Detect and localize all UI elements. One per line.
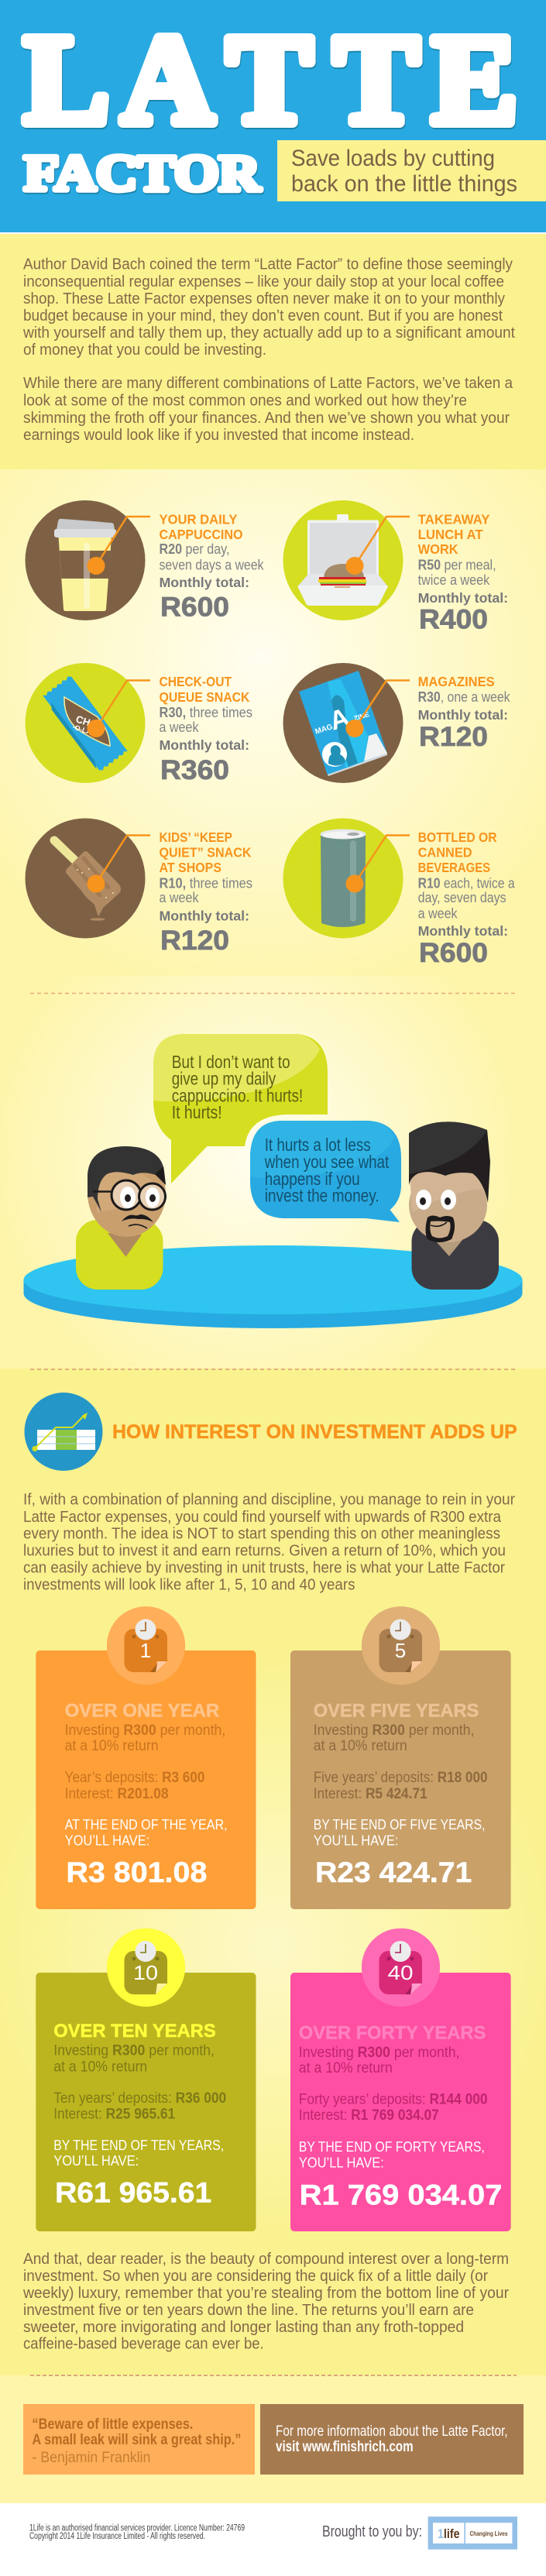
item text: QUEUE SNACK	[160, 689, 250, 705]
speech bubble: right: It hurts a lot less	[265, 1135, 371, 1155]
icon: ice lolly	[25, 818, 146, 939]
item text: BEVERAGES	[418, 860, 490, 875]
card: over forty years	[290, 1929, 511, 2231]
intro text block: Author David Bach coined the term “Latte Factor” to define those seemingly	[23, 256, 513, 273]
icon: lunch box	[283, 500, 403, 620]
footer legal text	[29, 2524, 245, 2541]
speech bubble: left: give up my daily	[172, 1069, 276, 1089]
card: over one year	[36, 1606, 256, 1909]
card text: at a 10% return	[65, 1737, 159, 1754]
item: canned beverages	[283, 818, 515, 968]
card: over five years	[290, 1606, 511, 1909]
investment text block: If, with a combination of planning and discipline, you manage to rein in your	[23, 1491, 515, 1509]
card text: Investing R300 per month,	[53, 2042, 215, 2059]
conversation scene	[23, 1034, 522, 1328]
item text: day, seven days	[418, 890, 507, 905]
item text: CHECK-OUT	[160, 674, 232, 689]
item text: Monthly total:	[160, 575, 249, 590]
item text: Monthly total:	[160, 737, 249, 753]
item: check-out snack	[25, 663, 252, 785]
quote box: “Beware of little expenses.	[32, 2416, 193, 2433]
closing text block: weekly) luxury, remember that you’re stealing from the bottom line of your	[22, 2284, 509, 2302]
investment text block: luxuries but to invest it and earn returns. Given a return of 10%, which you	[23, 1542, 506, 1560]
intro text block: skimming the froth off your finances. And then we’ve shown you what your	[23, 410, 510, 427]
card text: OVER TEN YEARS	[53, 2021, 216, 2042]
card text	[53, 2021, 226, 2208]
item text: R400	[419, 605, 488, 635]
icon: chocolate bar: -O-LA	[71, 723, 93, 737]
item: magazines	[283, 663, 510, 783]
card text	[299, 2022, 502, 2211]
card text: at a 10% return	[314, 1737, 407, 1754]
badge: 10: 10	[133, 1961, 158, 1984]
speech bubble: left: cappuccino. It hurts!	[172, 1086, 303, 1106]
header banner	[0, 0, 546, 232]
investment text block: investments will look like after 1, 5, 10 and 40 years	[23, 1576, 355, 1594]
card text: AT THE END OF THE YEAR,	[65, 1816, 228, 1832]
card text: Investing R300 per month,	[299, 2044, 460, 2061]
card text: Interest: R1 769 034.07	[299, 2107, 439, 2124]
badge: 5	[362, 1606, 440, 1685]
item: daily cappuccino	[25, 500, 264, 623]
logo: 1Life	[428, 2516, 517, 2550]
card text: OVER ONE YEAR	[65, 1701, 219, 1722]
footer legal text: 1Life is an authorised financial services provider. Licence Number: 24769	[29, 2524, 245, 2533]
investment text block: can easily achieve by investing in unit trusts, here is what your Latte Factor	[23, 1559, 505, 1577]
item text: Monthly total:	[418, 923, 508, 939]
item text: AT SHOPS	[160, 860, 221, 875]
card text: YOU’LL HAVE:	[314, 1832, 398, 1849]
quote box: A small leak will sink a great ship.”	[32, 2431, 241, 2448]
title: Latte: LATTE	[24, 9, 517, 150]
footer legal text: Copyright 2014 1Life Insurance Limited - All rights reserved.	[29, 2532, 205, 2541]
character: man with glasses	[76, 1146, 166, 1290]
closing text block	[22, 2250, 509, 2353]
closing text block: investment five or ten years down the line. The returns you’ll earn are	[23, 2301, 474, 2319]
item text: a week	[160, 720, 199, 735]
item: takeaway lunch	[283, 500, 508, 635]
item text: a week	[160, 890, 199, 905]
item text: Monthly total:	[418, 707, 508, 723]
icon: chocolate bar: CHO	[74, 713, 99, 731]
intro text block: with yourself and tally them up, they actually add up to a significant amount	[22, 325, 515, 342]
speech bubble: right: happens if you	[265, 1169, 360, 1189]
item text: R600	[419, 938, 488, 968]
icon: drink can	[283, 818, 403, 939]
item text: R30, one a week	[418, 689, 510, 705]
icon: magazine: A	[326, 702, 353, 737]
badge: 1: 1	[140, 1639, 151, 1662]
footer sponsor: Brought to you by:	[322, 2523, 422, 2540]
investment text block: Latte Factor expenses, you could find yourself with upwards of R300 extra	[23, 1508, 502, 1526]
item text	[160, 829, 252, 956]
intro text block: budget because in your mind, they don’t even count. But if you are honest	[23, 307, 503, 325]
intro text block: of money that you could be investing.	[23, 342, 266, 359]
callout line	[345, 680, 410, 737]
closing text block: caffeine-based beverage can ever be.	[23, 2335, 264, 2353]
item text: R10, three times	[160, 875, 252, 891]
card text: Interest: R25 965.61	[53, 2105, 175, 2122]
card text	[65, 1701, 228, 1888]
intro text block: While there are many different combinations of Latte Factors, we’ve taken a	[23, 375, 513, 392]
speech bubble: right	[250, 1121, 401, 1222]
card: over ten years	[36, 1929, 256, 2231]
intro text block: earnings would look like if you invested that income instead.	[23, 427, 414, 444]
section heading: interest: HOW INTEREST ON INVESTMENT ADDS UP	[112, 1421, 517, 1443]
icon: magazine	[283, 663, 403, 783]
callout line	[87, 835, 150, 892]
item text: R50 per meal,	[418, 558, 496, 573]
icon: growth chart	[25, 1393, 102, 1471]
item: kids snack	[25, 818, 252, 956]
item text	[418, 829, 515, 968]
investment text block: every month. The idea is NOT to start spending this on other meaningless	[23, 1525, 500, 1543]
item text: CAPPUCCINO	[160, 527, 243, 542]
card text	[314, 1701, 488, 1888]
card text: Investing R300 per month,	[314, 1722, 474, 1739]
card text: at a 10% return	[53, 2058, 147, 2075]
closing text block: And that, dear reader, is the beauty of compound interest over a long-term	[23, 2250, 509, 2268]
card text: Interest: R5 424.71	[314, 1785, 428, 1802]
card text: YOU’LL HAVE:	[53, 2152, 139, 2169]
item text: a week	[418, 905, 458, 921]
item text	[418, 512, 508, 635]
item text: twice a week	[418, 572, 490, 588]
item text: R20 per day,	[160, 541, 229, 557]
item text	[418, 674, 510, 752]
badge: 10	[107, 1929, 185, 2007]
badge: 40: 40	[387, 1961, 414, 1984]
item text: YOUR DAILY	[160, 512, 238, 527]
item text: MAGAZINES	[418, 674, 495, 689]
subtitle tag	[277, 140, 546, 201]
item text	[160, 674, 252, 785]
badge: 5: 5	[395, 1639, 406, 1662]
item text: seven days a week	[160, 558, 264, 573]
badge: 40	[362, 1929, 440, 2007]
item text: WORK	[418, 541, 458, 557]
section heading: interest	[25, 1393, 517, 1471]
card text: BY THE END OF FORTY YEARS,	[299, 2138, 485, 2155]
item text: R30, three times	[160, 705, 252, 720]
logo: 1Life: Changing Lives	[469, 2530, 508, 2537]
speech bubble: left: But I don’t want to	[172, 1052, 290, 1072]
item text: R360	[160, 755, 229, 785]
card text: R61 965.61	[55, 2176, 211, 2208]
intro text block: look at some of the most common ones and worked out how they’re	[23, 392, 467, 409]
item text: QUIET” SNACK	[160, 844, 252, 860]
item text: BOTTLED OR	[418, 829, 497, 845]
card text: OVER FIVE YEARS	[314, 1701, 479, 1722]
item text: CANNED	[418, 844, 472, 860]
icon: magazine: MAG	[314, 723, 334, 737]
item text: KIDS’ “KEEP	[160, 829, 232, 845]
callout line	[345, 835, 410, 892]
speech bubble: right: when you see what	[264, 1152, 390, 1172]
subtitle tag: Save loads by cutting	[291, 146, 495, 171]
intro text block: inconsequential regular expenses – like your daily stop at your local coffee	[23, 273, 504, 290]
icon: chocolate bar	[25, 663, 146, 783]
character: man with beard	[409, 1121, 499, 1290]
item text: R120	[160, 926, 229, 956]
item text: Monthly total:	[418, 590, 508, 606]
card text: OVER FORTY YEARS	[299, 2022, 486, 2043]
card text: R23 424.71	[315, 1856, 472, 1888]
badge: 1	[107, 1606, 185, 1685]
footer sponsor	[322, 2516, 517, 2550]
more information box	[260, 2404, 524, 2475]
card text: Forty years’ deposits: R144 000	[299, 2091, 488, 2108]
card text: Interest: R201.08	[65, 1785, 169, 1802]
card text: Year’s deposits: R3 600	[65, 1769, 205, 1786]
subtitle tag: back on the little things	[291, 171, 517, 197]
item text: R120	[419, 722, 488, 752]
item text: LUNCH AT	[418, 527, 483, 542]
speech bubble: left: It hurts!	[172, 1102, 222, 1122]
quote box	[23, 2404, 255, 2475]
item text: Monthly total:	[160, 908, 249, 923]
closing text block: investment. So when you are considering the quick fix of a little daily (or	[23, 2267, 488, 2285]
card text: BY THE END OF TEN YEARS,	[53, 2137, 224, 2153]
card text: Five years’ deposits: R18 000	[314, 1769, 488, 1786]
callout line	[87, 517, 150, 575]
card text: YOU’LL HAVE:	[299, 2155, 384, 2171]
item text: R600	[160, 592, 229, 623]
investment text block	[23, 1491, 515, 1594]
intro text block: shop. These Latte Factor expenses often never make it on to your monthly	[23, 290, 505, 307]
item text: R10 each, twice a	[418, 875, 515, 891]
logo: 1Life: 1life	[438, 2526, 460, 2541]
more information box: visit www.finishrich.com	[276, 2438, 414, 2455]
callout line	[87, 680, 150, 737]
icon: magazine: ZINE	[353, 710, 370, 723]
callout line	[345, 517, 410, 575]
card text: Investing R300 per month,	[65, 1722, 225, 1739]
item text	[160, 512, 264, 623]
closing text block: sweeter, more invigorating and longer lasting than any froth-topped	[23, 2318, 464, 2336]
card text: at a 10% return	[299, 2059, 393, 2076]
item text: TAKEAWAY	[418, 512, 490, 527]
quote box: - Benjamin Franklin	[32, 2449, 150, 2466]
intro text block	[22, 256, 515, 444]
card text: R1 769 034.07	[300, 2179, 502, 2211]
icon: coffee cup	[25, 500, 146, 620]
card text: R3 801.08	[66, 1856, 207, 1888]
card text: Ten years’ deposits: R36 000	[53, 2090, 226, 2107]
card text: BY THE END OF FIVE YEARS,	[314, 1816, 485, 1832]
title: Factor: FACTOR	[24, 146, 261, 201]
card text: YOU’LL HAVE:	[65, 1832, 149, 1849]
speech bubble: left	[153, 1034, 328, 1183]
platform	[23, 1245, 522, 1328]
speech bubble: right: invest the money.	[265, 1186, 379, 1206]
